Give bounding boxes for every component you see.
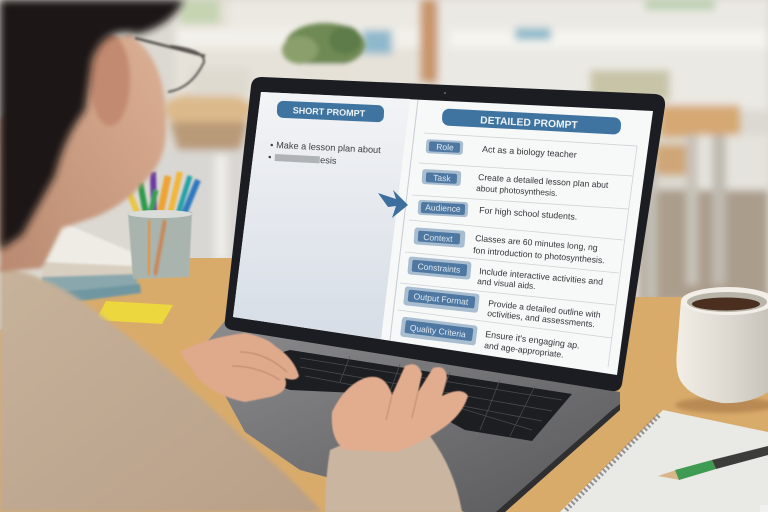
desk [0, 258, 768, 512]
hair [0, 0, 184, 250]
row: audience: For high school students. [479, 205, 578, 222]
row: quality criteria: and age-appropriate. [484, 340, 564, 360]
row: task: Create a detailed lesson plan abut [478, 172, 609, 190]
row: constraints: Constraints [417, 261, 461, 275]
row: context: fon introduction to photosynthesis. [473, 245, 605, 265]
table rules [398, 133, 637, 367]
left hand [180, 333, 299, 402]
keyboard [228, 350, 572, 441]
row: output format: Provide a detailed outline with [488, 298, 601, 320]
short prompt heading: SHORT PROMPT [293, 105, 366, 119]
panel: detailed prompt [398, 108, 637, 367]
small mark in corner [760, 505, 768, 512]
laptop lid [225, 77, 665, 391]
screen [233, 92, 653, 375]
row: output format: octivities, and assessments. [487, 308, 595, 329]
detailed prompt heading: DETAILED PROMPT [480, 115, 579, 131]
row: constraints: and visual aids. [477, 276, 536, 291]
row: role: Role [436, 142, 454, 153]
laptop base [200, 322, 620, 512]
detailed prompt heading [442, 108, 621, 135]
short prompt text: Make a lesson plan about [276, 140, 381, 155]
glasses [135, 38, 205, 92]
row: task: Task [433, 173, 452, 184]
notebook with spiral binding and pencil [560, 410, 768, 512]
arrow icon [378, 190, 408, 218]
face and neck [0, 35, 166, 272]
row: role: Act as a biology teacher [482, 144, 577, 160]
panel: short prompt [233, 92, 410, 339]
webcam [444, 92, 446, 94]
sweater sleeve [325, 433, 462, 512]
row: audience: Audience [425, 202, 461, 214]
row: task: about photosynthesis. [476, 183, 558, 198]
short prompt text: esis [320, 155, 337, 166]
row: context [414, 227, 605, 265]
coffee mug [675, 287, 768, 413]
row: quality criteria [400, 317, 580, 360]
row: quality criteria: Ensure it's engaging ap. [485, 329, 580, 351]
row: context: Context [423, 232, 454, 244]
yellow sticky note [96, 301, 173, 324]
short prompt text: • [268, 152, 272, 162]
row: task [422, 169, 609, 198]
row: output format [403, 286, 601, 329]
row: constraints: Include interactive activities and [479, 266, 604, 287]
stack of books [40, 222, 141, 305]
row: output format: Output Format [413, 291, 469, 307]
row: context: Classes are 60 minutes long, ng [475, 233, 598, 253]
pencil [658, 446, 768, 480]
pencil cup with coloured pencils [127, 172, 198, 279]
row: quality criteria: Quality Criteria [409, 323, 467, 339]
short prompt text [268, 140, 381, 166]
row: audience [418, 200, 578, 222]
blurred plant [282, 23, 365, 79]
row: constraints [407, 256, 604, 291]
divider [390, 100, 418, 340]
right hand [332, 364, 468, 452]
woman's back in beige sweater [0, 265, 322, 512]
short prompt text: • [270, 140, 274, 150]
ear [90, 34, 130, 126]
short prompt heading [277, 101, 384, 122]
woman's head [0, 0, 205, 272]
row: role [426, 139, 577, 160]
